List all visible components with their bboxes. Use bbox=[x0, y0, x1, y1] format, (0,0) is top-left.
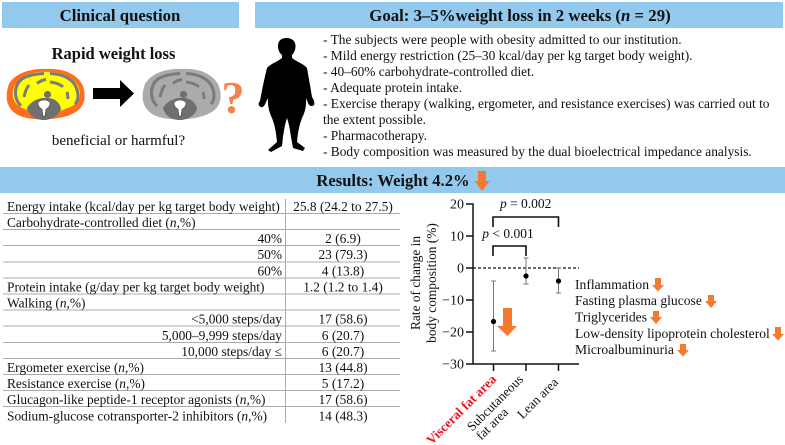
text block: methods list: - Mild energy restriction (25–30 kcal/day per kg target body weight). bbox=[323, 48, 693, 63]
table: intervention details: 10,000 steps/day ≤ bbox=[181, 344, 282, 359]
arrow: weight loss transition bbox=[93, 80, 134, 107]
zero reference line bbox=[473, 267, 579, 269]
table: intervention details: 17 (58.6) bbox=[318, 392, 368, 407]
list: improved metabolic outcomes: Triglycerides bbox=[575, 310, 647, 324]
y axis tick labels: −10 bbox=[442, 294, 464, 308]
panel: goal bbox=[255, 2, 783, 159]
list: improved metabolic outcomes: Microalbuminuria bbox=[575, 342, 674, 357]
y axis tick labels: 10 bbox=[450, 230, 464, 244]
data points bbox=[491, 273, 561, 324]
subheading: rapid weight loss: Rapid weight loss bbox=[52, 44, 176, 63]
table: intervention details: 25.8 (24.2 to 27.5) bbox=[293, 199, 393, 214]
list: improved metabolic outcomes: Inflammation bbox=[575, 277, 649, 292]
panel: clinical question bbox=[2, 2, 244, 149]
text block: methods list: - Adequate protein intake. bbox=[323, 80, 462, 95]
y axis tick labels: −30 bbox=[442, 358, 464, 372]
table: intervention details: 6 (20.7) bbox=[322, 344, 364, 359]
heading: results bbox=[0, 167, 785, 193]
table: intervention details: 14 (48.3) bbox=[318, 408, 368, 424]
heading: goal: Goal: 3–5%weight loss in 2 weeks (n = 29) bbox=[369, 6, 671, 25]
x axis category labels bbox=[423, 371, 561, 445]
p value: subcutaneous fat area: p < 0.001 bbox=[481, 226, 534, 241]
text block: methods list: - Exercise therapy (walking, ergometer, and resistance exercises) was carried out to bbox=[323, 96, 770, 111]
table: intervention details: 23 (79.3) bbox=[318, 247, 368, 262]
heading: goal bbox=[255, 2, 783, 28]
table: intervention details: Walking (n,%) bbox=[7, 296, 86, 310]
table: intervention details: 6 (20.7) bbox=[322, 328, 364, 343]
significance brackets bbox=[493, 217, 558, 256]
error bars bbox=[491, 258, 561, 351]
table: intervention details: 1.2 (1.2 to 1.4) bbox=[303, 280, 383, 294]
table: intervention details: 60% bbox=[257, 264, 282, 278]
chart: rate of change in body composition bbox=[408, 196, 579, 445]
y axis tick labels: 0 bbox=[457, 262, 464, 276]
table: intervention details: 2 (6.9) bbox=[325, 231, 361, 246]
table: intervention details: 5,000–9,999 steps/day bbox=[162, 328, 282, 343]
table: intervention details: Sodium-glucose cotransporter-2 inhibitors (n,%) bbox=[7, 408, 267, 424]
table: intervention details: Protein intake (g/day per kg target body weight) bbox=[7, 280, 264, 294]
x axis category labels: fat area bbox=[473, 404, 511, 443]
icon: person silhouette bbox=[259, 38, 314, 152]
list: improved metabolic outcomes: Low-density lipoprotein cholesterol bbox=[575, 326, 770, 341]
table: intervention details: 4 (13.8) bbox=[322, 264, 364, 278]
text block: methods list: - Pharmacotherapy. bbox=[323, 128, 427, 143]
table: intervention details bbox=[3, 199, 400, 424]
heading: results: Results: Weight 4.2% bbox=[316, 171, 470, 190]
table: intervention details: 17 (58.6) bbox=[318, 312, 368, 326]
icon: abdominal cross-section after bbox=[143, 69, 221, 120]
table: intervention details: 50% bbox=[257, 247, 282, 262]
y axis tick labels bbox=[442, 198, 464, 372]
table: intervention details: 40% bbox=[257, 231, 282, 246]
x axis category labels: Subcutaneous bbox=[464, 372, 526, 434]
table: intervention details: 13 (44.8) bbox=[318, 360, 368, 375]
text block: methods list: - The subjects were people with obesity admitted to our institution. bbox=[323, 32, 682, 47]
p value: lean area: p = 0.002 bbox=[499, 196, 551, 211]
icon: abdominal cross-section before bbox=[7, 69, 85, 120]
caption: beneficial or harmful: beneficial or harmful? bbox=[52, 133, 185, 149]
text block: methods list bbox=[323, 32, 770, 159]
list: improved metabolic outcomes: Fasting plasma glucose bbox=[575, 293, 702, 308]
list: improved metabolic outcomes bbox=[575, 277, 784, 357]
table: intervention details: Ergometer exercise (n,%) bbox=[7, 360, 144, 375]
table: intervention details: 5 (17.2) bbox=[322, 376, 364, 391]
y axis title bbox=[408, 223, 439, 343]
table: intervention details: Resistance exercise (n,%) bbox=[7, 376, 145, 391]
icon: question mark: ? bbox=[222, 72, 244, 123]
y axis tick labels: −20 bbox=[442, 326, 464, 340]
y axis tick labels: 20 bbox=[450, 198, 464, 212]
heading: clinical question bbox=[2, 2, 239, 28]
y axis title: body composition (%) bbox=[424, 223, 439, 343]
y axis title: Rate of change in bbox=[408, 236, 423, 330]
table: intervention details: Carbohydrate-controlled diet (n,%) bbox=[7, 215, 196, 230]
table: intervention details: Glucagon-like peptide-1 receptor agonists (n,%) bbox=[7, 392, 265, 407]
heading: clinical question: Clinical question bbox=[60, 6, 181, 25]
text block: methods list: the extent possible. bbox=[323, 112, 426, 127]
axes bbox=[466, 204, 579, 371]
text block: methods list: - 40–60% carbohydrate-controlled diet. bbox=[323, 64, 534, 79]
arrow: visceral fat decrease bbox=[497, 308, 517, 336]
x axis category labels: Lean area bbox=[514, 374, 561, 422]
table: intervention details: <5,000 steps/day bbox=[191, 312, 282, 326]
text block: methods list: - Body composition was measured by the dual bioelectrical impedance analysis. bbox=[323, 144, 752, 159]
table: intervention details: Energy intake (kcal/day per kg target body weight) bbox=[7, 199, 280, 214]
